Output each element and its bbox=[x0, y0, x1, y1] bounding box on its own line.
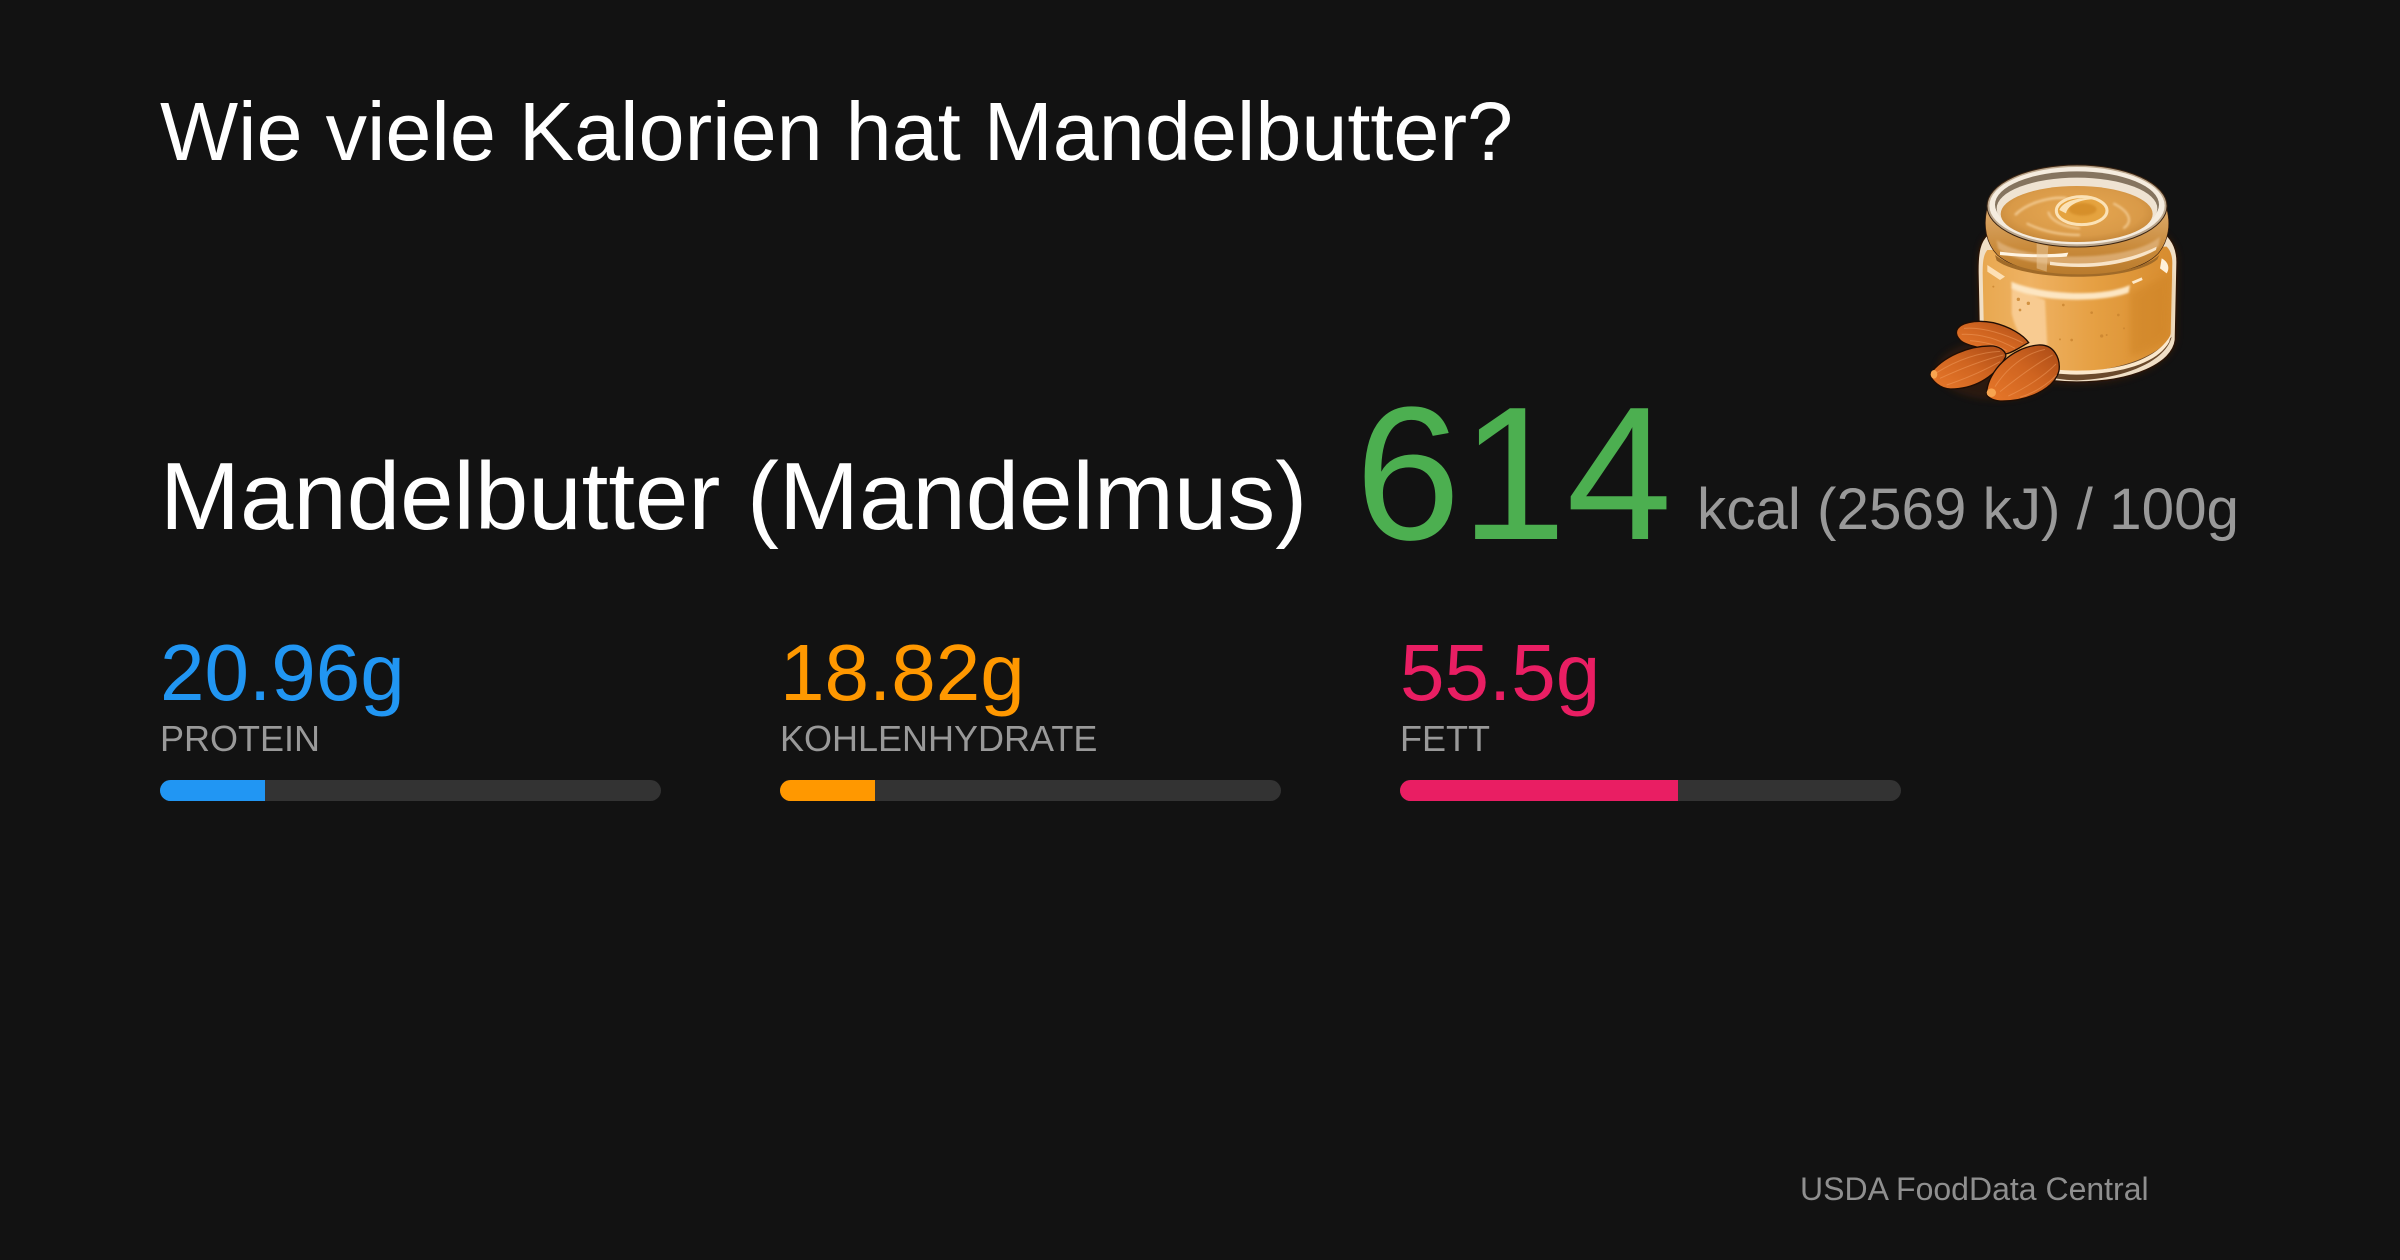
butter surface with swirl bbox=[2001, 186, 2153, 242]
calorie value: 614 bbox=[1355, 368, 1672, 580]
carbohydrates value: 18.82g bbox=[780, 628, 1025, 717]
almond: front bbox=[1987, 345, 2059, 401]
food name heading: Mandelbutter (Mandelmus) bbox=[160, 443, 1307, 550]
protein value: 20.96g bbox=[160, 628, 405, 717]
title: Wie viele Kalorien hat Mandelbutter? bbox=[160, 85, 1513, 178]
nutrient: protein bbox=[160, 628, 405, 759]
icon: almond butter jar with almonds bbox=[1930, 164, 2180, 402]
almond: top bbox=[1956, 321, 2029, 354]
fat value: 55.5g bbox=[1400, 628, 1600, 717]
fat bar bbox=[1400, 780, 1901, 801]
fat label: FETT bbox=[1400, 718, 1490, 759]
protein bar bbox=[160, 780, 661, 801]
almond: left bbox=[1930, 346, 2006, 389]
jar neck and glass rim bbox=[1985, 165, 2169, 277]
nutrient: carbohydrates bbox=[780, 628, 1097, 759]
protein label: PROTEIN bbox=[160, 718, 320, 759]
nutrient: fat bbox=[1400, 628, 1600, 759]
jar body bbox=[1978, 233, 2177, 382]
carbohydrates bar bbox=[780, 780, 1281, 801]
calorie unit: kcal (2569 kJ) / 100g bbox=[1697, 477, 2239, 542]
almonds bbox=[1930, 321, 2059, 401]
soft glow behind the jar and almonds bbox=[1937, 233, 2178, 400]
source: USDA FoodData Central bbox=[1800, 1171, 2149, 1207]
carbohydrates label: KOHLENHYDRATE bbox=[780, 718, 1097, 759]
